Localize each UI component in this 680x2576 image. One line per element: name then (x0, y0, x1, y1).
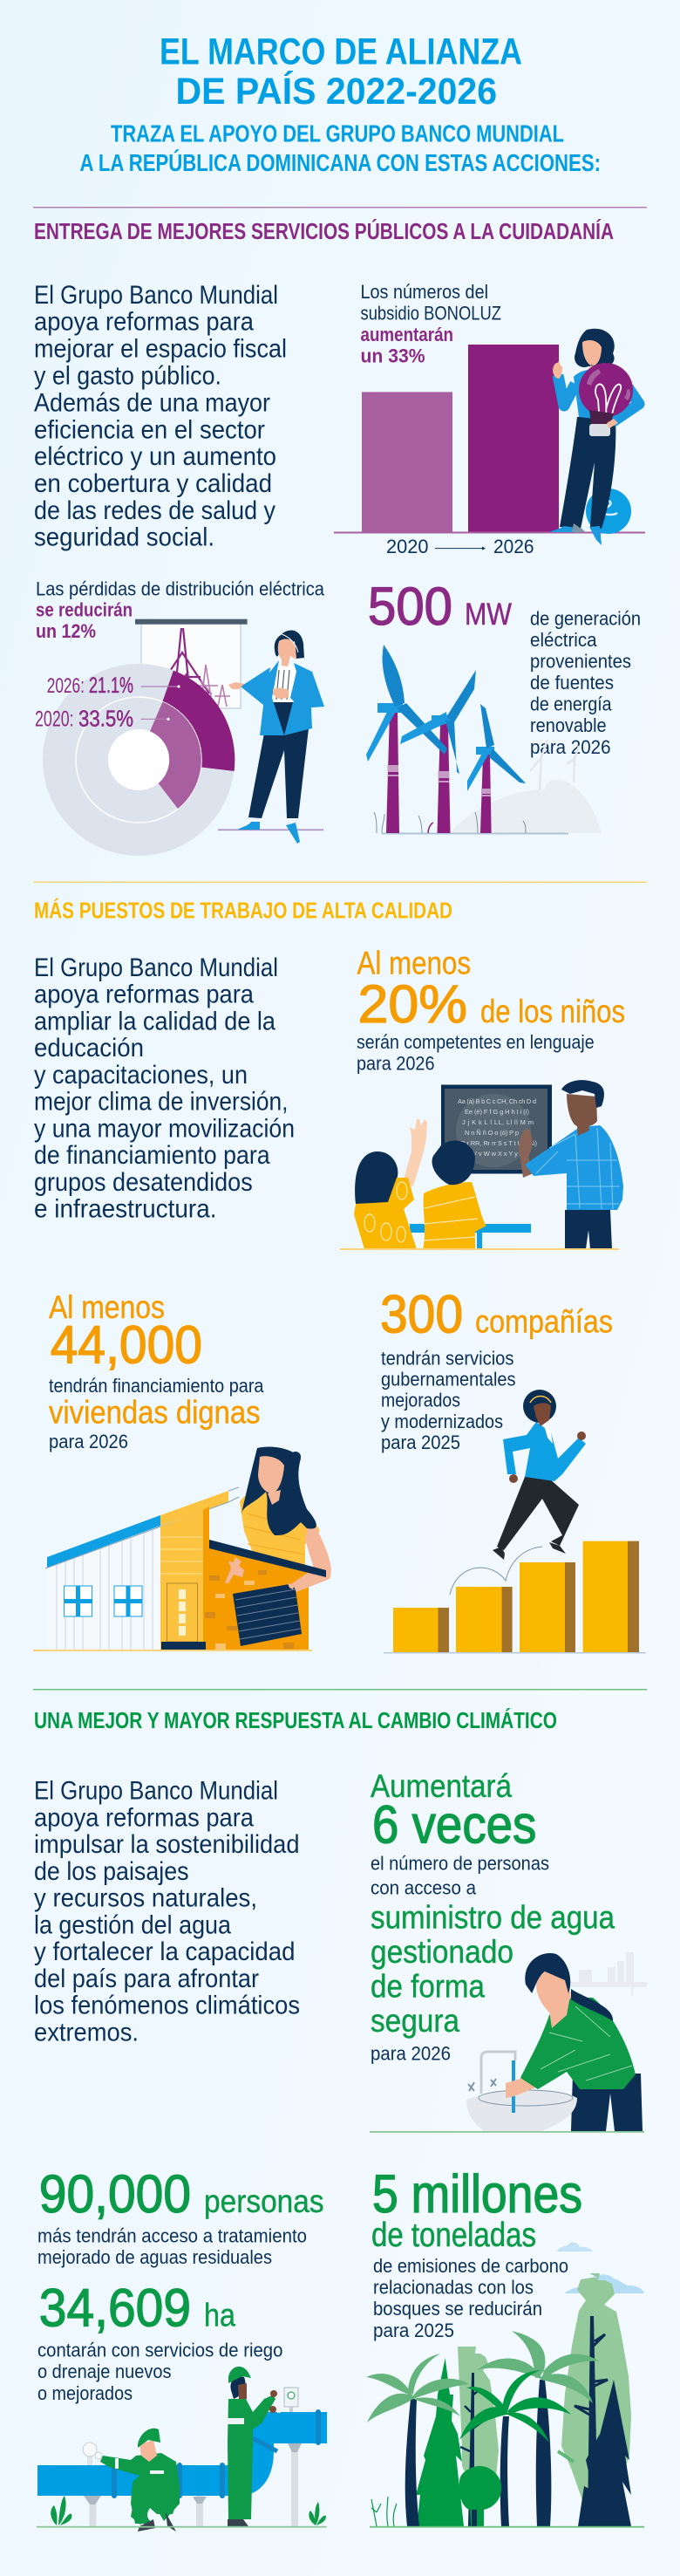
stat: 5 millones de toneladas (371, 2164, 582, 2341)
text: pérdidas de distribución: Las pérdidas de distribución eléctrica (36, 578, 324, 600)
text block: reformas clima: del país para afrontar (34, 1964, 259, 1993)
stat: 500 MW: MW (465, 598, 512, 632)
stat: 6 veces suministro de agua: gestionado (371, 1934, 513, 1970)
stat: 90,000 personas: mejorado de aguas residuales (37, 2246, 272, 2268)
icon: classroom with blackboard: J j K k L l LL, Ll ll M m (462, 1118, 534, 1126)
donut chart: pérdidas: 2020: (35, 707, 74, 732)
donut chart: pérdidas: 2026: (47, 674, 85, 698)
stat: 34,609 ha: 34,609 (39, 2279, 191, 2338)
bar chart: ascending steps with runner (384, 1390, 646, 1654)
icon: classroom with blackboard: R r RR, Rr rr S s T t U u (ú) (460, 1139, 537, 1147)
icon: classroom with blackboard (340, 1080, 623, 1250)
text: subsidio BONOLUZ: Los números del (361, 281, 488, 303)
text block: reformas clima: extremos. (34, 2018, 139, 2046)
stat: 20% de los niños (357, 946, 625, 1075)
stat: 300 compañías: gubernamentales (381, 1368, 516, 1390)
stat: 300 compañías: tendrán servicios (381, 1347, 514, 1369)
stat: 5 millones de toneladas: de toneladas (371, 2217, 536, 2254)
text: generación renovable: de energía (530, 694, 612, 715)
text: generación renovable: para 2026 (530, 736, 610, 758)
stat: 300 compañías: para 2025 (381, 1431, 460, 1453)
text: generación renovable: de fuentes (530, 672, 614, 694)
stat: 6 veces suministro de agua: Aumentará (371, 1768, 512, 1804)
stat: 6 veces suministro de agua: segura (371, 2003, 459, 2039)
icon: presenter woman (218, 631, 324, 844)
text: generación renovable (530, 608, 641, 758)
stat: 6 veces suministro de agua: de forma (371, 1968, 485, 2004)
text block: reformas clima (34, 1777, 300, 2046)
stat: 6 veces suministro de agua: para 2026 (371, 2043, 451, 2065)
stat: 20% de los niños: de los niños (480, 994, 625, 1029)
title: EL MARCO DE ALIANZA (160, 31, 522, 73)
stat: 20% de los niños: Al menos (357, 946, 471, 981)
stat: 90,000 personas: 90,000 (39, 2164, 191, 2224)
text block: reformas clima: impulsar la sostenibilidad (34, 1830, 300, 1859)
text block: reformas empleo: grupos desatendidos (34, 1168, 253, 1197)
subtitle (80, 120, 601, 176)
stat: 20% de los niños: 20% (357, 974, 467, 1034)
text block: reformas servicios: Además de una mayor (34, 388, 270, 417)
stat: 5 millones de toneladas: para 2025 (373, 2320, 454, 2341)
text: pérdidas de distribución (36, 578, 324, 642)
text block: reformas empleo: educación (34, 1034, 144, 1063)
text block: reformas clima: y fortalecer la capacidad (34, 1937, 295, 1966)
stat: 6 veces suministro de agua: con acceso a (371, 1877, 476, 1899)
stat: 6 veces suministro de agua: 6 veces (372, 1795, 536, 1855)
text block: reformas clima: El Grupo Banco Mundial (34, 1777, 278, 1806)
stat: 6 veces suministro de agua: suministro de agua (371, 1900, 615, 1936)
stat: 44,000 viviendas dignas (49, 1289, 264, 1452)
icon: woman washing hands (370, 1952, 647, 2133)
text: generación renovable: renovable (530, 714, 607, 736)
text block: reformas servicios: seguridad social. (34, 523, 214, 552)
stat: 34,609 ha: contarán con servicios de riego (37, 2340, 282, 2361)
stat: 5 millones de toneladas: relacionadas con los (373, 2277, 534, 2298)
text block: reformas servicios: y el gasto público. (34, 361, 221, 391)
stat: 90,000 personas: personas (204, 2183, 324, 2219)
text: generación renovable: eléctrica (530, 629, 597, 651)
icon: classroom with blackboard: V v W w X x Y y Z z (473, 1150, 528, 1158)
text block: reformas empleo: de financiamiento para (34, 1141, 270, 1170)
stat: 20% de los niños: serán competentes en lenguaje (357, 1031, 595, 1053)
text block: reformas servicios: mejorar el espacio fiscal (34, 335, 287, 364)
text block: reformas servicios: eficiencia en el sector (34, 415, 265, 444)
stat: 500 MW (368, 577, 512, 636)
stat: 44,000 viviendas dignas: 44,000 (51, 1315, 202, 1375)
text block: reformas servicios: en cobertura y calidad (34, 469, 272, 498)
icon: presentation board with electric towers (135, 619, 248, 708)
stat: 90,000 personas (37, 2164, 324, 2268)
text block: reformas empleo (34, 953, 295, 1224)
text: pérdidas de distribución: se reducirán (36, 599, 133, 621)
text block: reformas empleo: apoya reformas para (34, 981, 254, 1009)
stat: 34,609 ha: o drenaje nuevos (37, 2361, 171, 2382)
text: generación renovable: de generación (530, 608, 641, 630)
stat: 6 veces suministro de agua: el número de personas (371, 1852, 549, 1874)
stat: 5 millones de toneladas: de emisiones de carbono (373, 2255, 568, 2277)
text block: reformas servicios: apoya reformas para (34, 308, 254, 337)
bar chart: BONOLUZ (334, 345, 645, 557)
text: generación renovable: provenientes (530, 651, 631, 673)
bar chart: BONOLUZ: 2026 (493, 536, 534, 557)
text block: reformas clima: apoya reformas para (34, 1803, 254, 1832)
heading: puestos de trabajo: MÁS PUESTOS DE TRABAJO DE ALTA CALIDAD (34, 899, 452, 924)
icon: pipes and workers (37, 2367, 327, 2532)
stat: 6 veces suministro de agua (371, 1768, 615, 2065)
icon: house and woman (33, 1446, 331, 1651)
text block: reformas clima: los fenómenos climáticos (34, 1992, 300, 2020)
icon: woman holding light bulb (549, 329, 639, 545)
title: DE PAÍS 2022-2026 (176, 71, 497, 113)
text block: reformas clima: de los paisajes (34, 1857, 189, 1886)
text block: reformas empleo: mejor clima de inversión, (34, 1088, 288, 1117)
text: pérdidas de distribución: un 12% (36, 620, 96, 642)
stat: 300 compañías (380, 1285, 613, 1453)
icon: wind turbines (366, 645, 602, 834)
stat: 34,609 ha (37, 2279, 282, 2404)
text block: reformas empleo: y una mayor movilización (34, 1114, 295, 1143)
text block: reformas empleo: ampliar la calidad de la (34, 1007, 275, 1036)
donut chart: pérdidas: 33.5% (78, 706, 133, 732)
stat: 90,000 personas: más tendrán acceso a tratamiento (37, 2225, 307, 2247)
stat: 300 compañías: mejorados (381, 1390, 460, 1411)
stat: 44,000 viviendas dignas: tendrán financiamiento para (49, 1375, 264, 1397)
text block: reformas clima: y recursos naturales, (34, 1884, 257, 1913)
text block: reformas clima: la gestión del agua (34, 1910, 231, 1939)
text block: reformas servicios: de las redes de salud y (34, 496, 275, 525)
text block: reformas empleo: e infraestructura. (34, 1195, 216, 1224)
text: subsidio BONOLUZ: aumentarán (361, 324, 453, 345)
stat: 5 millones de toneladas: bosques se reducirán (373, 2298, 542, 2320)
bar chart: BONOLUZ: 2020 (386, 536, 429, 557)
text: subsidio BONOLUZ: subsidio BONOLUZ (361, 302, 501, 325)
heading: cambio climático: UNA MEJOR Y MAYOR RESPUESTA AL CAMBIO CLIMÁTICO (34, 1708, 557, 1733)
icon: classroom with blackboard: Aa (á) B b C c CH, Ch ch D d (458, 1097, 536, 1105)
stat: 5 millones de toneladas: 5 millones (372, 2164, 582, 2224)
stat: 500 MW: 500 (368, 577, 452, 636)
text block: reformas empleo: El Grupo Banco Mundial (34, 953, 278, 982)
title (160, 31, 522, 113)
stat: 300 compañías: compañías (475, 1304, 613, 1340)
stat: 34,609 ha: ha (204, 2298, 235, 2333)
text block: reformas servicios: eléctrico y un aumento (34, 442, 276, 471)
stat: 44,000 viviendas dignas: Al menos (49, 1289, 165, 1325)
icon: forest with palms and clouds (366, 2242, 644, 2528)
donut chart: pérdidas (35, 664, 235, 856)
icon: classroom with blackboard: N n Ñ ñ O o (ó) P p (465, 1129, 519, 1137)
stat: 300 compañías: 300 (380, 1285, 463, 1344)
stat: 44,000 viviendas dignas: viviendas dignas (49, 1395, 260, 1431)
text: subsidio BONOLUZ: un 33% (361, 345, 425, 366)
icon: classroom with blackboard: Ee (é) F f G g H h I i (í) (465, 1108, 530, 1116)
text block: reformas empleo: y capacitaciones, un (34, 1061, 248, 1090)
text: subsidio BONOLUZ (361, 281, 501, 366)
stat: 300 compañías: y modernizados (381, 1411, 503, 1432)
text block: reformas servicios (34, 281, 287, 552)
subtitle: TRAZA EL APOYO DEL GRUPO BANCO MUNDIAL (111, 120, 564, 147)
donut chart: pérdidas: 21.1% (89, 673, 133, 698)
text block: reformas servicios: El Grupo Banco Mundial (34, 281, 278, 310)
stat: 20% de los niños: para 2026 (357, 1053, 434, 1075)
stat: 34,609 ha: o mejorados (37, 2382, 133, 2404)
stat: 44,000 viviendas dignas: para 2026 (49, 1431, 128, 1452)
